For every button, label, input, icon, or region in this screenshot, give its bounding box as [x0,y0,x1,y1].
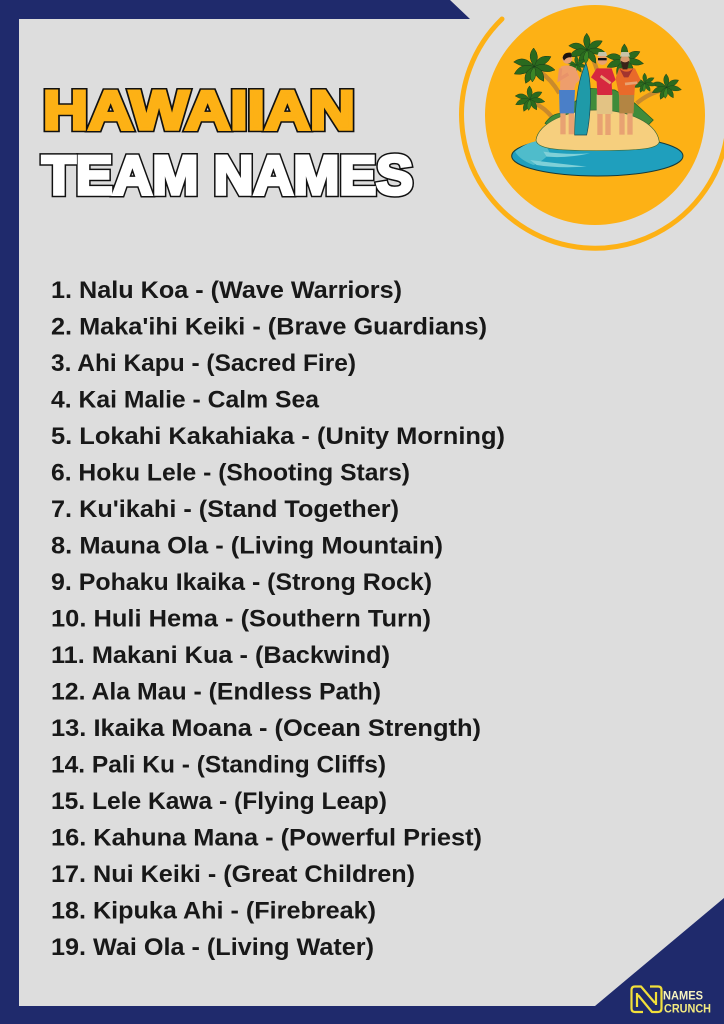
heading: Hawaiian Team Names: TEAM NAMES [42,144,413,206]
list of team names: 18. Kipuka Ahi - (Firebreak) [51,898,376,924]
heading: Hawaiian Team Names [42,79,413,206]
logo: Names Crunch [632,986,711,1016]
water [512,136,683,176]
list of team names: 1. Nalu Koa - (Wave Warriors) [51,277,402,304]
heading: Hawaiian Team Names: HAWAIIAN [43,79,355,141]
list of team names: 13. Ikaika Moana - (Ocean Strength) [51,715,481,742]
list of team names [51,277,505,961]
list of team names: 7. Ku'ikahi - (Stand Together) [51,496,399,523]
man with orange shirt [616,52,641,135]
list of team names: 4. Kai Malie - Calm Sea [51,386,319,414]
list of team names: 19. Wai Ola - (Living Water) [51,934,374,961]
heading: Hawaiian Team Names: TEAM NAMES [42,144,413,206]
decorative ring around illustration [462,19,724,248]
icon: yellow circle with island and three men [485,5,705,225]
palm trees [514,33,682,111]
sand island [536,110,659,151]
palm trunks [535,57,663,117]
logo: Names Crunch: NAMES [663,990,703,1002]
list of team names: 8. Mauna Ola - (Living Mountain) [51,532,443,560]
list of team names: 15. Lele Kawa - (Flying Leap) [51,788,387,815]
logo: Names Crunch: CRUNCH [664,1004,711,1016]
list of team names: 10. Huli Hema - (Southern Turn) [51,606,431,632]
man with red shirt [591,52,616,135]
list of team names: 2. Maka'ihi Keiki - (Brave Guardians) [51,314,487,340]
list of team names: 12. Ala Mau - (Endless Path) [51,678,381,706]
list of team names: 9. Pohaku Ikaika - (Strong Rock) [51,569,432,596]
list of team names: 5. Lokahi Kakahiaka - (Unity Morning) [51,423,505,450]
list of team names: 6. Hoku Lele - (Shooting Stars) [51,460,410,486]
list of team names: 11. Makani Kua - (Backwind) [51,642,390,669]
surfboard [575,63,590,135]
list of team names: 3. Ahi Kapu - (Sacred Fire) [51,350,356,377]
list of team names: 16. Kahuna Mana - (Powerful Priest) [51,824,482,852]
green bushes [545,88,653,127]
man with blue shorts [559,53,580,134]
heading: Hawaiian Team Names: HAWAIIAN [43,79,355,141]
icon: N logo mark [632,986,662,1012]
list of team names: 14. Pali Ku - (Standing Cliffs) [51,752,386,778]
list of team names: 17. Nui Keiki - (Great Children) [51,861,415,888]
